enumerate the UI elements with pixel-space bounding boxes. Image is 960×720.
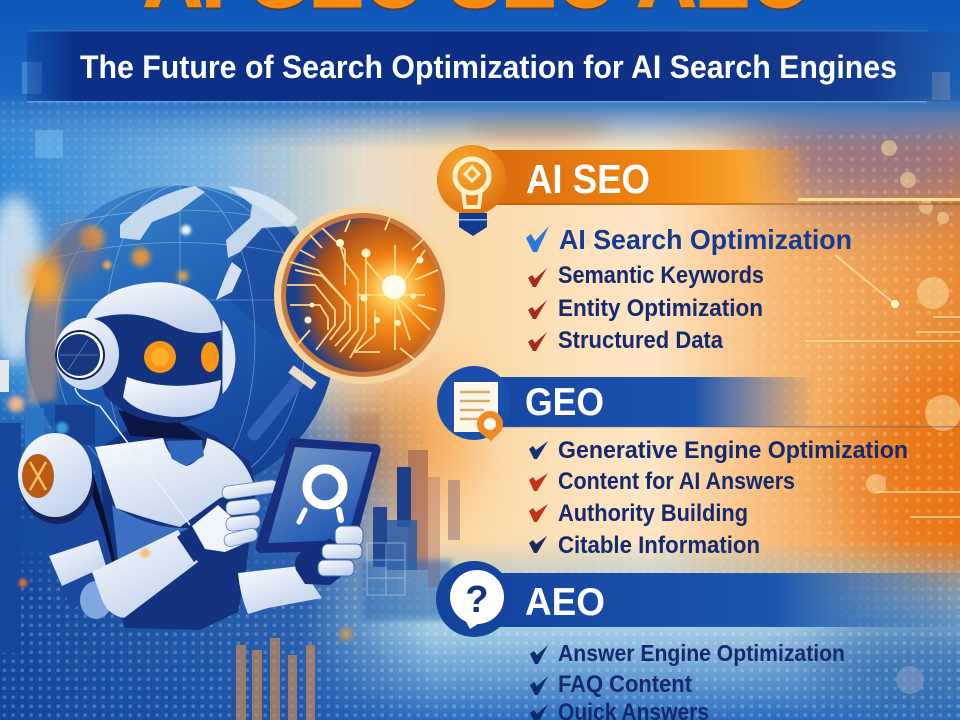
circuit traces (287, 212, 438, 360)
neck (118, 410, 182, 434)
icon: search lens (299, 469, 343, 522)
elbow (80, 581, 112, 619)
list (526, 224, 852, 354)
panel: AEO (436, 561, 960, 720)
header bar: AEO (525, 581, 605, 624)
head (84, 282, 236, 423)
list (529, 437, 908, 559)
shoulder (18, 433, 94, 524)
list: Authority Building (558, 500, 748, 527)
header bar (495, 377, 960, 428)
panel: AI SEO (437, 145, 960, 354)
pointing hand (192, 479, 279, 552)
icon: question bubble: ? (465, 579, 489, 621)
upper arm (42, 495, 112, 610)
right skyline (350, 415, 460, 620)
header bar (480, 150, 960, 205)
globe (25, 185, 335, 495)
left skyline (0, 360, 95, 653)
list: Structured Data (558, 327, 724, 354)
lower hand (295, 526, 363, 585)
lower forearm (238, 566, 322, 614)
list: FAQ Content (558, 671, 692, 698)
list (530, 640, 845, 720)
header bar: AI SEO (526, 156, 650, 202)
list: Generative Engine Optimization (558, 437, 908, 464)
tablet (256, 438, 380, 553)
torso base and belly (88, 412, 256, 630)
panel: GEO (437, 366, 960, 559)
subtitle banner (27, 30, 960, 102)
list: Entity Optimization (558, 295, 763, 322)
list: Answer Engine Optimization (558, 640, 845, 666)
headphone (55, 318, 119, 390)
bottom bars (236, 628, 352, 720)
icon: document with badge (437, 366, 511, 441)
headset wire (75, 388, 190, 525)
header bar (495, 573, 960, 627)
right decorative circuit (805, 140, 960, 694)
list: Content for AI Answers (558, 468, 795, 495)
list: Citable Information (558, 532, 760, 559)
list: Semantic Keywords (558, 262, 764, 289)
icon: light bulb (437, 145, 507, 236)
magnifying glass (254, 206, 452, 434)
wrist (177, 527, 206, 562)
header bar: GEO (525, 381, 604, 424)
subtitle banner: The Future of Search Optimization for AI Search Engines (80, 49, 897, 85)
icon: question bubble (436, 561, 512, 637)
forearm (92, 530, 198, 618)
robot (18, 282, 322, 630)
list: AI Search Optimization (559, 224, 852, 255)
